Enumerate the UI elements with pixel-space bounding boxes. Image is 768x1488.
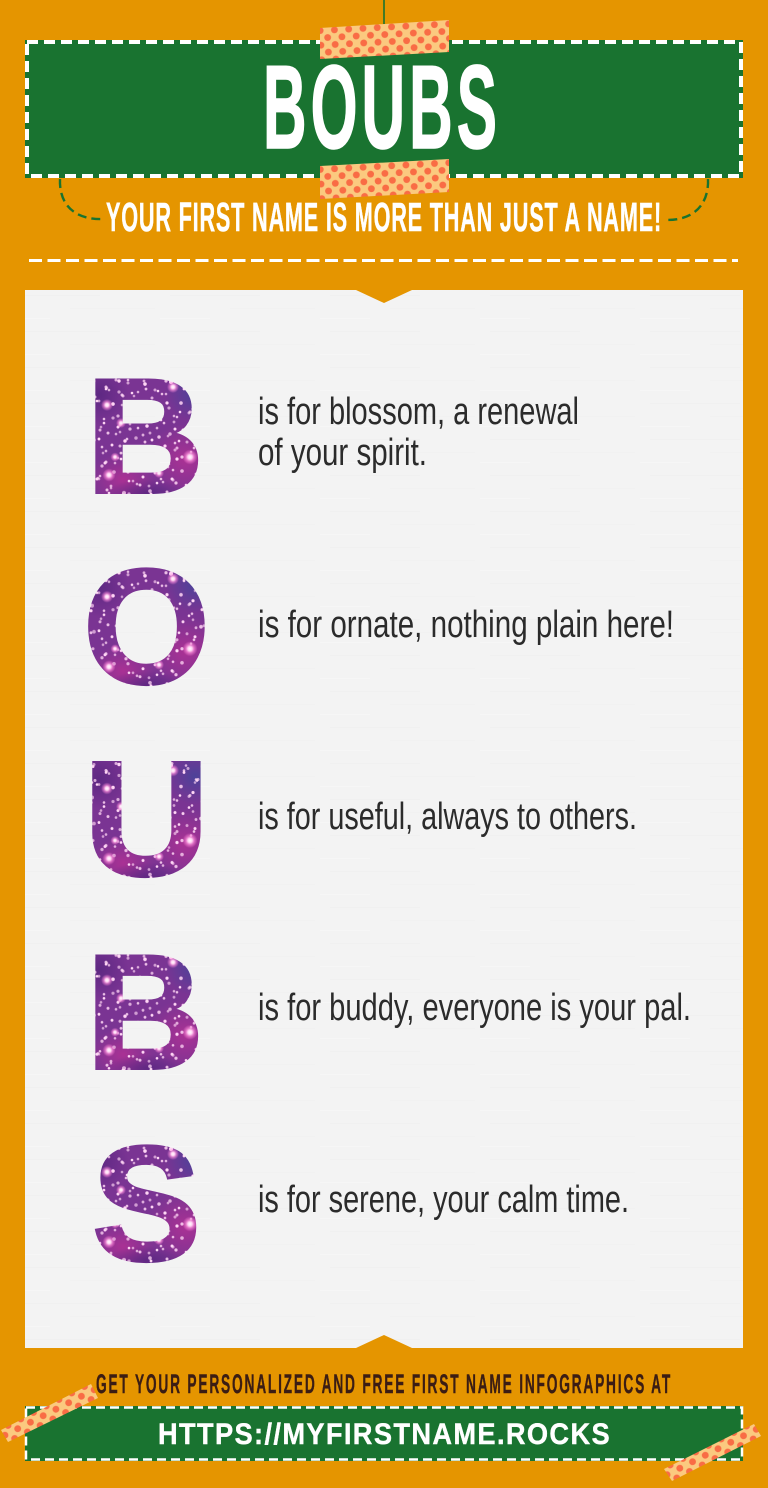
letter U: U	[84, 728, 209, 910]
letter B: B	[86, 346, 204, 527]
panel: letters	[25, 290, 743, 1348]
text: blossom: is for blossom, a renewal	[258, 391, 579, 433]
tape: top	[320, 20, 449, 59]
text: blossom: of your spirit.	[258, 432, 427, 474]
text: useful: is for useful, always to others.	[258, 796, 637, 838]
hanging string	[383, 0, 385, 24]
url banner	[25, 1406, 743, 1461]
dashed divider	[29, 259, 738, 262]
row: letter U	[84, 728, 637, 910]
title: BOUBS	[263, 41, 501, 174]
row: letter B	[86, 346, 579, 527]
tape: bottom right	[664, 1424, 761, 1481]
letter S: S	[92, 1114, 201, 1294]
left connector curve	[60, 179, 103, 219]
row: letter O	[84, 536, 674, 718]
letter B: B	[86, 922, 204, 1103]
url text: HTTPS://MYFIRSTNAME.ROCKS	[158, 1418, 611, 1451]
row: letter B second	[86, 922, 691, 1103]
letter O: O	[84, 536, 210, 718]
tape: bottom left	[1, 1384, 98, 1442]
right connector curve	[667, 179, 708, 220]
tape: bottom	[320, 159, 449, 199]
title banner	[25, 40, 743, 178]
row: letter S	[92, 1114, 629, 1294]
text: serene: is for serene, your calm time.	[258, 1179, 629, 1221]
